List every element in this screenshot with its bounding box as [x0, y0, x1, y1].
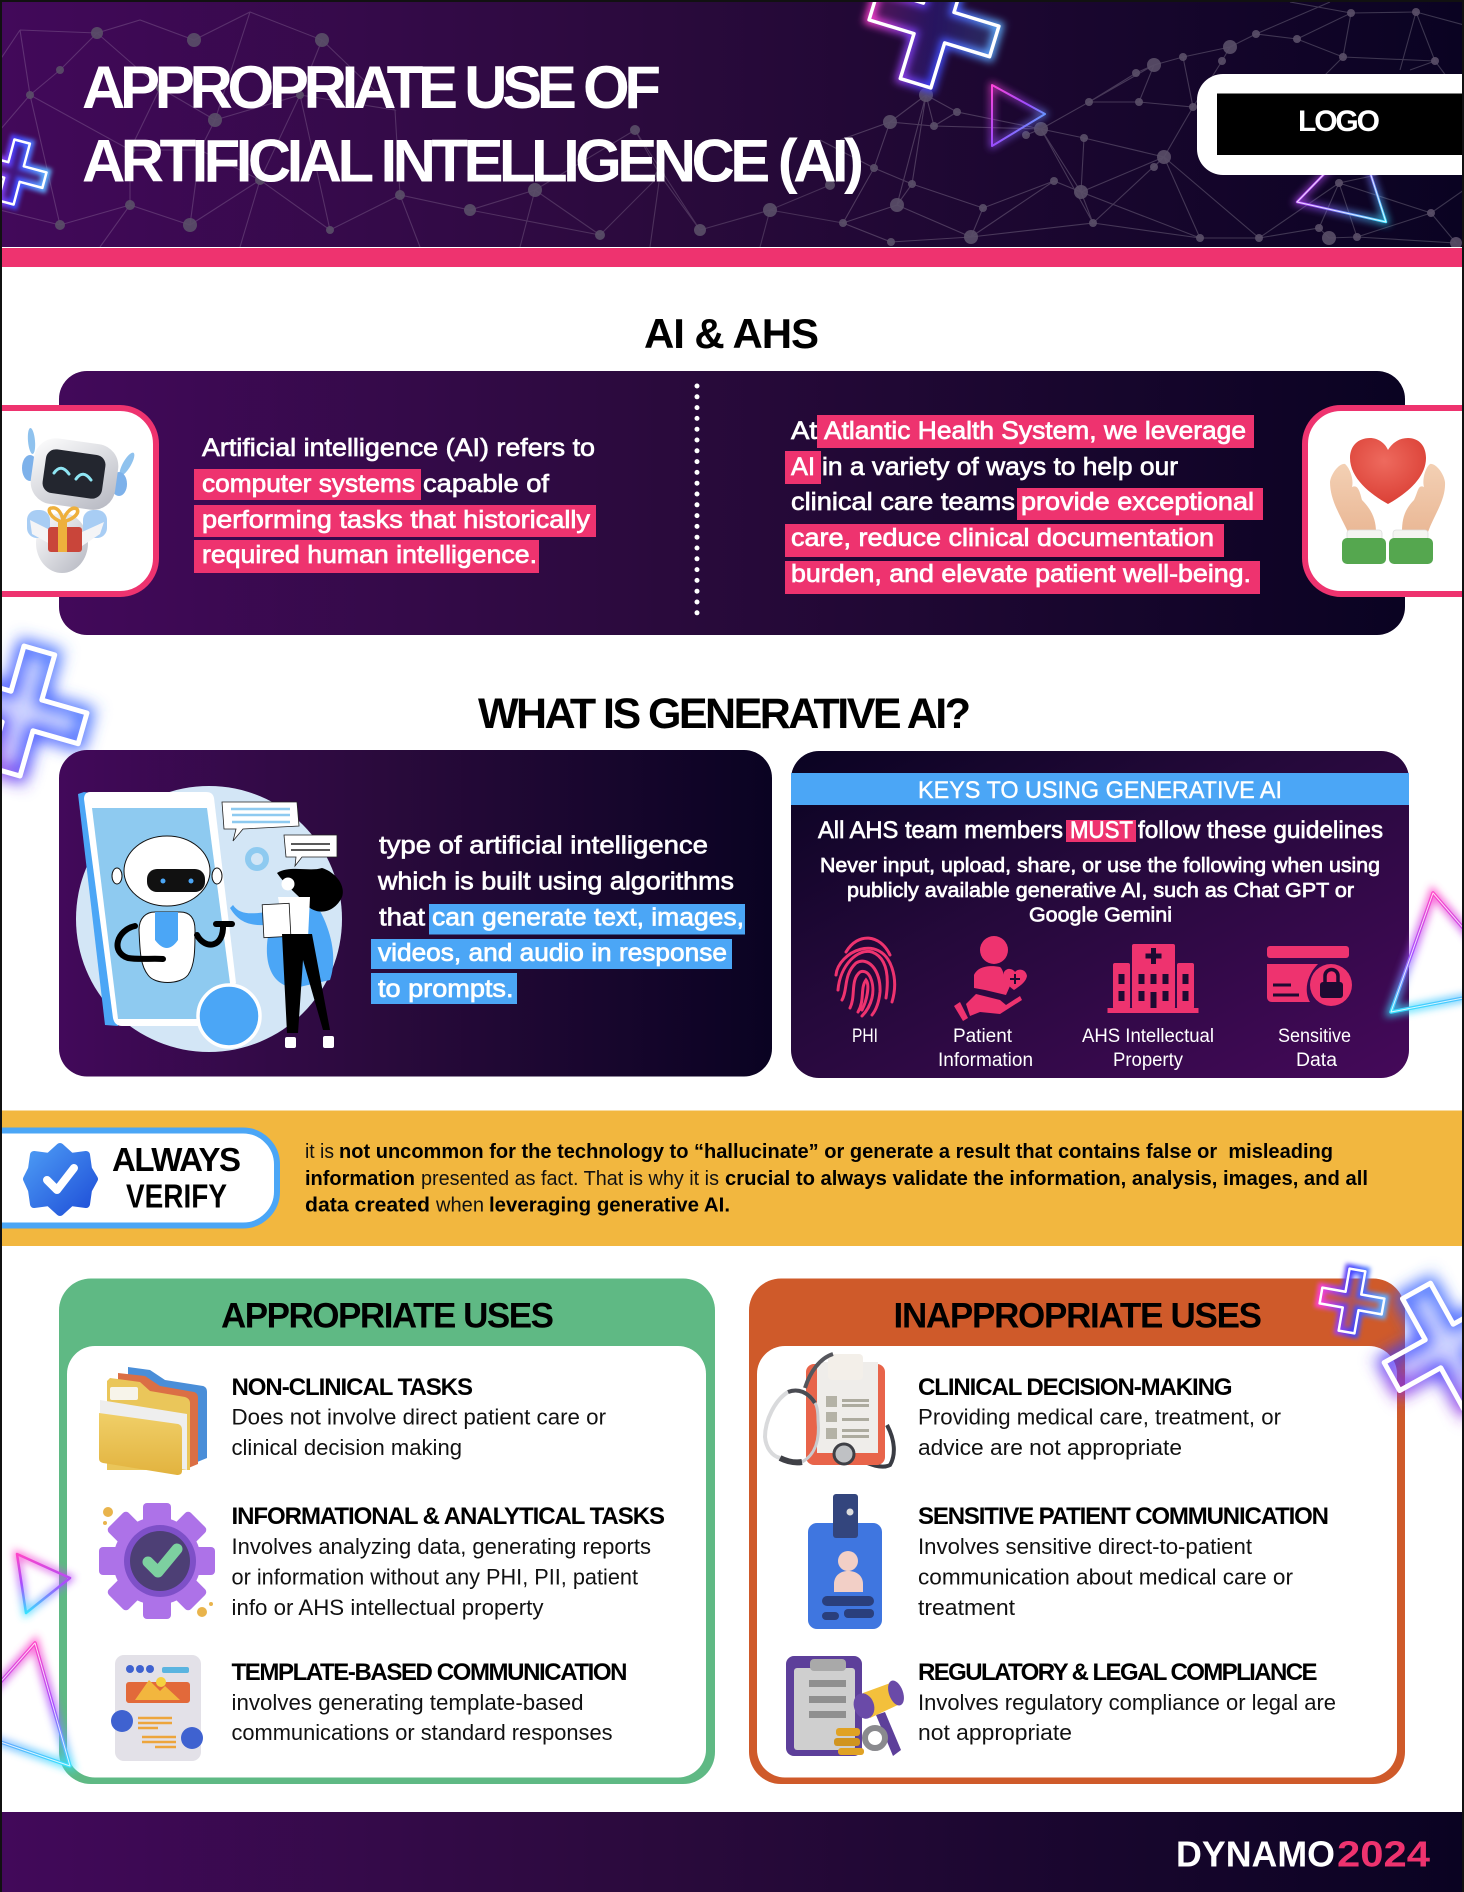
- text: informational and analytical tasks: INFORMATIONAL & ANALYTICAL TASKS: [232, 1503, 665, 1530]
- icon: fingerprint: [836, 938, 895, 1016]
- text: informational and analytical tasks: info or AHS intellectual property: [232, 1595, 544, 1620]
- label: sensitive data: [1278, 1026, 1351, 1071]
- text: non-clinical tasks: [232, 1374, 606, 1460]
- label: AHS intellectual property: Property: [1113, 1050, 1183, 1071]
- text: hallucination warning: data created: [305, 1194, 430, 1216]
- text: hallucination warning: leveraging generative AI.: [489, 1194, 730, 1216]
- text: AI definition: Artificial intelligence (AI) refers to: [202, 434, 595, 462]
- icon: patient information: [954, 936, 1027, 1021]
- text: AHS statement: [785, 415, 1263, 594]
- text: AI definition: computer systems: [202, 470, 415, 498]
- text: informational and analytical tasks: [232, 1503, 665, 1620]
- text: sensitive patient communication: Involves sensitive direct-to-patient: [918, 1534, 1252, 1559]
- text: generative AI definition: to prompts.: [378, 975, 514, 1003]
- footer brand: DYNAMO: [1176, 1834, 1335, 1874]
- neon triangle under logo: [1289, 175, 1394, 230]
- text: AI definition: capable of: [423, 470, 549, 498]
- text: informational and analytical tasks: or information without any PHI, PII, patient: [232, 1564, 638, 1590]
- band: keys heading: KEYS TO USING GENERATIVE AI: [918, 777, 1282, 804]
- text: clinical decision-making: advice are not appropriate: [918, 1435, 1182, 1460]
- title: APPROPRIATE USE OF: [82, 54, 661, 121]
- icon: legal document and gavel: [786, 1656, 907, 1756]
- text: clinical decision-making: Providing medical care, treatment, or: [918, 1404, 1281, 1430]
- label: patient information: Information: [938, 1050, 1033, 1071]
- icon: robot with gift: [22, 428, 137, 573]
- label: patient information: [938, 1026, 1033, 1071]
- text: regulatory and legal compliance: REGULATORY & LEGAL COMPLIANCE: [918, 1659, 1318, 1686]
- badge: always verify: ALWAYS: [112, 1141, 241, 1178]
- text: hallucination warning: it is: [305, 1141, 334, 1163]
- header banner: [0, 0, 1464, 249]
- text: hallucination warning: when: [435, 1194, 484, 1216]
- text: clinical decision-making: CLINICAL DECISION-MAKING: [918, 1374, 1232, 1401]
- label: patient information: Patient: [953, 1026, 1013, 1047]
- icon: template document: [111, 1655, 203, 1761]
- text: guidelines: All AHS team members: [818, 817, 1063, 844]
- text: AHS statement: At: [791, 417, 817, 445]
- neon cross header left: [0, 133, 53, 211]
- band: keys heading: [791, 773, 1409, 805]
- text: generative AI definition: type of artificial intelligence: [379, 832, 708, 860]
- text: generative AI definition: [371, 832, 745, 1004]
- text: sensitive patient communication: treatment: [918, 1595, 1015, 1620]
- logo box: LOGO: [1298, 105, 1380, 138]
- text: hallucination warning: information: [305, 1168, 415, 1190]
- label: sensitive data: Data: [1296, 1050, 1337, 1071]
- text: sensitive patient communication: [918, 1503, 1329, 1620]
- text: template-based communication: [232, 1659, 628, 1745]
- badge: always verify: VERIFY: [126, 1178, 227, 1214]
- text: sensitive patient communication: communication about medical care or: [918, 1564, 1293, 1590]
- panel: appropriate uses: [59, 1278, 715, 1784]
- icon: sensitive data card: [1267, 946, 1352, 1006]
- left robot card: [0, 408, 156, 594]
- text: informational and analytical tasks: Involves analyzing data, generating reports: [232, 1534, 651, 1559]
- neon triangle right middle: [1391, 893, 1464, 1012]
- text: guidelines: [818, 817, 1383, 926]
- label: PHI: PHI: [852, 1026, 878, 1047]
- icon: stethoscope clipboard: [765, 1354, 894, 1467]
- badge: always verify: [0, 1130, 277, 1226]
- title: ARTIFICIAL INTELLIGENCE (AI): [82, 128, 864, 194]
- text: template-based communication: involves generating template-based: [232, 1690, 584, 1715]
- pink divider bar: [0, 248, 1464, 267]
- label: AHS intellectual property: [1082, 1026, 1214, 1071]
- text: AHS statement: clinical care teams: [791, 488, 1015, 516]
- text: generative AI definition: videos, and audio in response: [378, 939, 727, 967]
- heading: inappropriate uses: INAPPROPRIATE USES: [894, 1296, 1262, 1336]
- text: AHS statement: Atlantic Health System, we leverage: [824, 417, 1246, 445]
- text: guidelines: follow these guidelines: [1138, 817, 1383, 844]
- text: regulatory and legal compliance: [918, 1659, 1336, 1745]
- panel: inappropriate uses: [749, 1278, 1405, 1784]
- text: guidelines: publicly available generative AI, such as Chat GPT or: [847, 879, 1354, 902]
- divider: dotted line: [694, 386, 700, 614]
- text: regulatory and legal compliance: Involves regulatory compliance or legal are: [918, 1690, 1336, 1715]
- logo box: [1197, 74, 1464, 175]
- title: [82, 54, 864, 194]
- text: hallucination warning: presented as fact. That is why it is: [421, 1168, 719, 1190]
- band: always verify: [0, 1110, 1464, 1246]
- text: AHS statement: AI: [791, 453, 815, 481]
- label: sensitive data: Sensitive: [1278, 1026, 1351, 1047]
- text: non-clinical tasks: NON-CLINICAL TASKS: [232, 1374, 473, 1401]
- neon triangle header: [992, 85, 1045, 146]
- neon triangle left: [17, 1554, 70, 1613]
- text: AHS statement: care, reduce clinical documentation: [791, 524, 1214, 552]
- text: non-clinical tasks: Does not involve direct patient care or: [232, 1404, 606, 1430]
- text: template-based communication: communications or standard responses: [232, 1720, 612, 1745]
- neon cross top: [855, 0, 1013, 102]
- icon: folders: [99, 1367, 207, 1475]
- text: generative AI definition: can generate text, images,: [432, 904, 744, 932]
- heading: AI & AHS: AI & AHS: [644, 310, 819, 357]
- neon cross small right: [1316, 1265, 1388, 1337]
- text: AI definition: required human intelligence.: [202, 541, 537, 569]
- panel: AI and AHS: [59, 371, 1405, 635]
- text: template-based communication: TEMPLATE-BASED COMMUNICATION: [232, 1659, 628, 1686]
- text: AHS statement: in a variety of ways to help our: [822, 453, 1178, 481]
- text: regulatory and legal compliance: not appropriate: [918, 1720, 1072, 1745]
- text: AHS statement: burden, and elevate patient well-being.: [791, 560, 1251, 588]
- neon triangle bottom left: [0, 1643, 70, 1766]
- heading: what is generative AI: WHAT IS GENERATIVE AI?: [478, 690, 971, 738]
- footer: [0, 1812, 1464, 1892]
- illustration: robot on phone with woman: [76, 786, 343, 1052]
- text: generative AI definition: which is built using algorithms: [377, 868, 734, 896]
- icon: ID badge: [808, 1494, 882, 1629]
- icon: verified badge: [27, 1147, 94, 1212]
- panel: keys to using generative AI: [791, 751, 1409, 1078]
- neon cross left middle: [0, 633, 100, 789]
- heading: appropriate uses: APPROPRIATE USES: [221, 1296, 554, 1336]
- panel: what is generative AI: [59, 750, 772, 1076]
- footer brand: 2024: [1337, 1834, 1430, 1874]
- neon cross large right: [1361, 1260, 1464, 1432]
- text: guidelines: Never input, upload, share, or use the following when using: [820, 854, 1380, 877]
- text: guidelines: Google Gemini: [1029, 904, 1172, 926]
- text: AI definition: performing tasks that historically: [202, 506, 591, 534]
- text: sensitive patient communication: SENSITIVE PATIENT COMMUNICATION: [918, 1503, 1329, 1530]
- text: non-clinical tasks: clinical decision making: [232, 1435, 462, 1460]
- text: hallucination warning: crucial to always validate the information, analysis, images, and all: [725, 1168, 1368, 1190]
- icon: hospital: [1108, 944, 1198, 1013]
- text: generative AI definition: that: [379, 904, 425, 932]
- text: clinical decision-making: [918, 1374, 1281, 1460]
- text: hallucination warning: not uncommon for the technology to “hallucinate” or generate a result that contains false or misleading: [339, 1141, 1333, 1163]
- icon: hands holding heart: [1330, 438, 1445, 564]
- label: AHS intellectual property: AHS Intellectual: [1082, 1026, 1214, 1047]
- footer brand: [1176, 1834, 1430, 1874]
- right heart card: [1305, 408, 1464, 594]
- text: AHS statement: provide exceptional: [1021, 488, 1254, 516]
- text: AI definition: [194, 434, 596, 573]
- icon: gear with check: [99, 1503, 215, 1619]
- text: guidelines: MUST: [1070, 817, 1133, 844]
- text: hallucination warning: [305, 1141, 1368, 1216]
